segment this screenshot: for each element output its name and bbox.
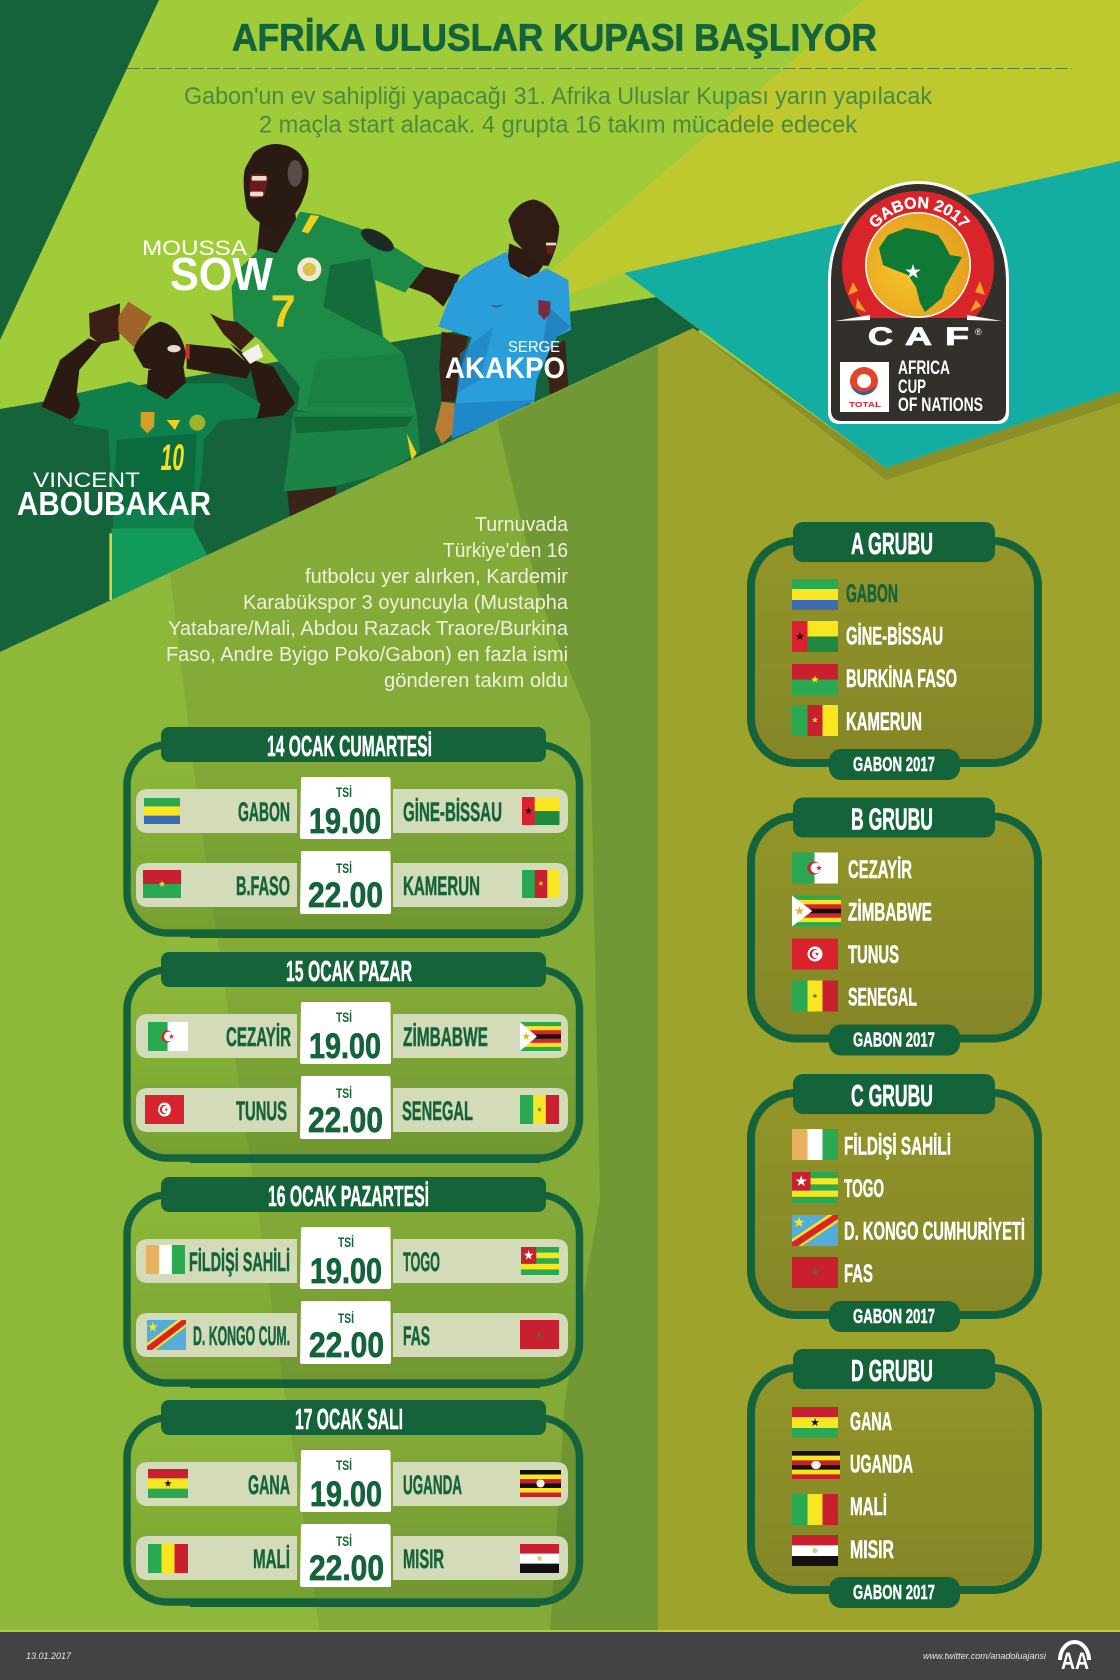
player name: Vincent Aboubakar: VINCENT — [33, 469, 140, 492]
player name: Moussa Sow: SOW — [170, 248, 274, 300]
heading: B Grubu: B GRUBU — [851, 802, 933, 836]
footer tag: Gabon 2017: GABON 2017 — [853, 1306, 935, 1328]
title: AFRİKA ULUSLAR KUPASI BAŞLIYOR — [232, 18, 877, 60]
team list: group A — [792, 579, 957, 736]
footer bar — [0, 1630, 1120, 1680]
team list: group D: GANA — [850, 1408, 892, 1436]
match: Mali vs Mısır — [136, 1524, 568, 1588]
match: Fildişi Sahili vs Togo: TOGO — [403, 1247, 440, 1277]
match: Gabon vs Gine-Bissau: TSİ — [336, 784, 352, 800]
match: Burkina Faso vs Kamerun — [136, 851, 568, 915]
logo: arc text: GABON 2017 — [870, 196, 970, 227]
match: Gana vs Uganda: TSİ — [336, 1457, 352, 1473]
team list: group C: FİLDİŞİ SAHİLİ — [844, 1132, 951, 1160]
heading: 17 Ocak Salı — [161, 1400, 546, 1436]
team list: group B — [792, 852, 932, 1012]
match: Gabon vs Gine-Bissau: 19.00 — [309, 802, 381, 841]
icon: Anadolu Agency logo: AA — [1061, 1648, 1089, 1675]
footer date: 13.01.2017 — [26, 1651, 72, 1662]
match: Tunus vs Senegal: SENEGAL — [402, 1096, 473, 1126]
match: Mali vs Mısır: MALİ — [253, 1544, 290, 1574]
team list: group A: KAMERUN — [846, 708, 922, 736]
match: Tunus vs Senegal: TUNUS — [236, 1096, 287, 1126]
match: Mali vs Mısır: 22.00 — [309, 1549, 384, 1588]
panel: matches 17 Ocak — [127, 1400, 580, 1607]
logo: CAF letters: F — [945, 323, 969, 351]
player name: Serge Akakpo — [445, 339, 565, 385]
team list: group A: GİNE-BİSSAU — [846, 622, 943, 650]
team list: group D — [792, 1407, 913, 1566]
match: D. Kongo Cum. vs Fas — [136, 1301, 568, 1365]
match: Gana vs Uganda: GANA — [248, 1470, 290, 1500]
match: Fildişi Sahili vs Togo: FİLDİŞİ SAHİLİ — [189, 1247, 290, 1277]
match: Mali vs Mısır: TSİ — [336, 1533, 352, 1549]
footer twitter address: www.twitter.com/anadoluajansi — [923, 1651, 1047, 1662]
player name: Serge Akakpo: AKAKPO — [445, 352, 565, 385]
player name: Vincent Aboubakar — [17, 469, 211, 522]
intro text: 2 maçla start alacak. 4 grupta 16 takım mücadele edecek — [259, 112, 858, 138]
paragraph: Turkish league players: Turnuvada — [475, 514, 569, 536]
intro text — [184, 83, 933, 138]
match: Gana vs Uganda: 19.00 — [310, 1475, 382, 1514]
match: Cezayir vs Zimbabwe: TSİ — [336, 1009, 352, 1025]
match: D. Kongo Cum. vs Fas: TSİ — [338, 1310, 354, 1326]
player name: Moussa Sow — [142, 237, 274, 300]
logo: Total box — [840, 362, 889, 412]
footer tag: Gabon 2017: GABON 2017 — [853, 1582, 935, 1604]
logo: Africa Cup of Nations: AFRICA — [898, 358, 950, 379]
player name: Vincent Aboubakar: ABOUBAKAR — [17, 485, 211, 522]
team list: group D: MALİ — [850, 1493, 887, 1521]
panel: A Grubu — [751, 522, 1038, 780]
CAF Gabon 2017 logo: ® — [975, 327, 982, 337]
paragraph: Turkish league players: gönderen takım oldu — [384, 670, 568, 692]
footer tag: Gabon 2017: GABON 2017 — [853, 754, 935, 776]
match: Gabon vs Gine-Bissau: GİNE-BİSSAU — [403, 797, 502, 827]
match: D. Kongo Cum. vs Fas: 22.00 — [309, 1326, 384, 1365]
match: Gabon vs Gine-Bissau: GABON — [238, 797, 290, 827]
logo: Africa Cup of Nations: OF NATIONS — [898, 395, 983, 416]
match: Burkina Faso vs Kamerun: KAMERUN — [403, 871, 480, 901]
match: Mali vs Mısır: MISIR — [403, 1544, 444, 1574]
panel: D Grubu — [751, 1349, 1038, 1608]
match: D. Kongo Cum. vs Fas: FAS — [403, 1321, 430, 1351]
team list: group A: BURKİNA FASO — [846, 665, 957, 693]
paragraph: Turkish league players: Türkiye'den 16 — [443, 540, 568, 562]
match: Cezayir vs Zimbabwe: ZİMBABWE — [403, 1022, 488, 1052]
footer tag: Gabon 2017 — [829, 749, 960, 780]
heading: 15 Ocak Pazar: 15 OCAK PAZAR — [286, 956, 412, 988]
heading: C Grubu — [793, 1074, 995, 1114]
match: Gana vs Uganda — [136, 1450, 568, 1514]
match: Fildişi Sahili vs Togo: TSİ — [338, 1234, 354, 1250]
heading: C Grubu: C GRUBU — [851, 1078, 933, 1113]
match: Cezayir vs Zimbabwe: 19.00 — [309, 1027, 381, 1066]
player: Moussa Sow: 7 — [271, 286, 296, 337]
team list: group B: SENEGAL — [848, 984, 917, 1012]
match: Fildişi Sahili vs Togo — [136, 1227, 568, 1291]
logo: Africa map — [879, 228, 962, 312]
match: Burkina Faso vs Kamerun: B.FASO — [236, 871, 290, 901]
logo: Africa Cup of Nations — [898, 358, 983, 416]
team list: group D: MISIR — [850, 1536, 894, 1564]
team list: group D: UGANDA — [850, 1450, 913, 1478]
match: Tunus vs Senegal: 22.00 — [308, 1101, 383, 1140]
paragraph: Turkish league players: Karabükspor 3 oyuncuyla (Mustapha — [243, 592, 569, 614]
panel: B Grubu — [751, 798, 1038, 1056]
player: Moussa Sow — [232, 144, 460, 518]
team list: group B: CEZAYİR — [848, 856, 912, 884]
footer tag: Gabon 2017: GABON 2017 — [853, 1030, 935, 1052]
team list: group C: TOGO — [844, 1175, 884, 1203]
CAF Gabon 2017 logo — [828, 181, 1009, 424]
heading: A Grubu: A GRUBU — [851, 526, 933, 561]
heading: 14 Ocak Cumartesi — [161, 727, 546, 763]
footer tag: Gabon 2017 — [829, 1577, 960, 1608]
match: Cezayir vs Zimbabwe: CEZAYİR — [226, 1022, 291, 1052]
footer tag: Gabon 2017 — [829, 1301, 960, 1332]
paragraph: Turkish league players: Faso, Andre Byigo Poko/Gabon) en fazla ismi — [166, 644, 568, 666]
heading: 17 Ocak Salı: 17 OCAK SALI — [295, 1404, 403, 1436]
heading: 16 Ocak Pazartesi: 16 OCAK PAZARTESİ — [268, 1181, 429, 1213]
player name: Moussa Sow: MOUSSA — [142, 237, 247, 260]
paragraph: Turkish league players: futbolcu yer alırken, Kardemir — [305, 566, 568, 588]
panel: matches 16 Ocak — [127, 1177, 580, 1388]
team list: group C: FAS — [844, 1260, 873, 1288]
team list: group C — [792, 1129, 1025, 1288]
heading: B Grubu — [793, 798, 995, 838]
team list: group A: GABON — [846, 580, 898, 608]
footer tag: Gabon 2017 — [829, 1024, 960, 1056]
paragraph: Turkish league players: Yatabare/Mali, Abdou Razack Traore/Burkina — [168, 618, 569, 640]
heading: 15 Ocak Pazar — [161, 952, 546, 988]
match: Gana vs Uganda: UGANDA — [403, 1470, 462, 1500]
heading: D Grubu — [793, 1349, 995, 1389]
match: Gabon vs Gine-Bissau — [136, 777, 568, 841]
paragraph: Turkish league players — [166, 514, 569, 692]
intro text: Gabon'un ev sahipliği yapacağı 31. Afrika Uluslar Kupası yarın yapılacak — [184, 83, 933, 110]
heading: A Grubu — [793, 522, 995, 562]
logo: CAF letters: C — [868, 323, 893, 351]
panel: matches 15 Ocak — [127, 952, 580, 1163]
panel: matches 14 Ocak — [127, 727, 580, 938]
heading: 14 Ocak Cumartesi: 14 OCAK CUMARTESİ — [267, 731, 432, 763]
team list: group B: ZİMBABWE — [848, 898, 932, 926]
match: Cezayir vs Zimbabwe — [136, 1002, 568, 1066]
match: Tunus vs Senegal: TSİ — [336, 1085, 352, 1101]
heading: 16 Ocak Pazartesi — [161, 1177, 546, 1213]
team list: group B: TUNUS — [848, 941, 899, 969]
player name: Serge Akakpo: SERGE — [508, 339, 560, 356]
player: Vincent Aboubakar — [42, 302, 295, 602]
heading: D Grubu: D GRUBU — [851, 1353, 933, 1388]
match: D. Kongo Cum. vs Fas: D. KONGO CUM. — [193, 1321, 290, 1351]
players photo illustration — [42, 144, 598, 602]
match: Burkina Faso vs Kamerun: TSİ — [336, 860, 352, 876]
panel: C Grubu — [751, 1074, 1038, 1332]
logo: Africa Cup of Nations: CUP — [898, 377, 926, 398]
player: Vincent Aboubakar: 10 — [161, 436, 184, 478]
icon: Anadolu Agency logo — [1060, 1642, 1089, 1675]
match: Fildişi Sahili vs Togo: 19.00 — [310, 1252, 382, 1291]
match: Burkina Faso vs Kamerun: 22.00 — [308, 876, 383, 915]
logo: CAF letters: A — [905, 323, 932, 351]
logo: Total box: TOTAL — [849, 400, 882, 409]
logo: CAF letters — [868, 323, 969, 351]
player: Serge Akakpo — [435, 199, 598, 455]
match: Tunus vs Senegal — [136, 1076, 568, 1140]
